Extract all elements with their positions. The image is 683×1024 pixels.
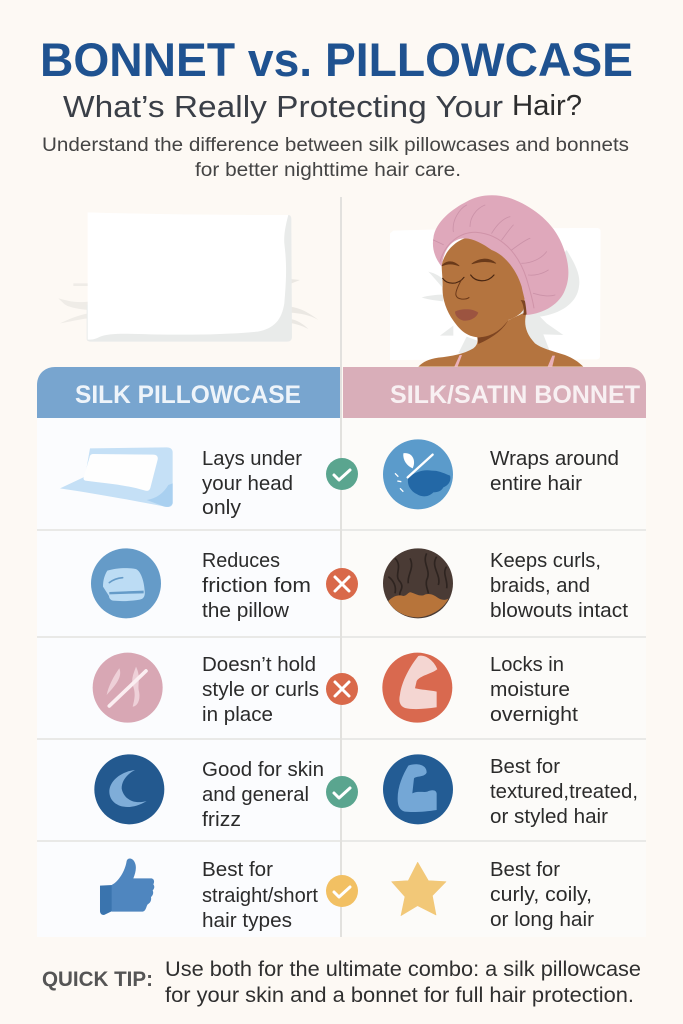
row 1 left text: only (202, 497, 241, 519)
subtitle heading: Hair? (512, 90, 582, 122)
row 4 left text: and general (202, 784, 309, 806)
bonnet pleats (433, 205, 555, 296)
check badge yellow (326, 875, 358, 907)
title: BONNET vs. PILLOWCASE (40, 33, 633, 86)
row 3 right text: overnight (490, 704, 578, 726)
row 2 right text (490, 550, 628, 622)
row 4 right icon: flexed arm (383, 754, 453, 824)
quick tip text: for your skin and a bonnet for full hair protection. (165, 984, 634, 1007)
row 5 right text: Best for (490, 859, 560, 881)
panel header: silk/satin bonnet (343, 367, 646, 418)
illustration: sleeping woman in bonnet (390, 195, 601, 367)
cross badge (326, 673, 358, 705)
panel header: silk pillowcase: SILK PILLOWCASE (75, 381, 301, 409)
row 2 left icon: folded silk (91, 548, 161, 618)
row 3 left text: in place (202, 704, 273, 726)
panel header: silk pillowcase (37, 367, 340, 418)
subtitle heading: What’s Really Protecting Your (63, 89, 503, 124)
row 3 right text: moisture (490, 679, 570, 701)
row 4 left text (202, 759, 324, 831)
row 1 right text: entire hair (490, 473, 582, 495)
row 4 left text: frizz (202, 809, 241, 831)
row 1 right icon: wrap (383, 439, 453, 509)
intro text: for better nighttime hair care. (195, 160, 461, 181)
row 5 right text (490, 859, 594, 931)
row 3 right icon: arm strength (382, 653, 452, 723)
nose (456, 279, 469, 299)
intro text: Understand the difference between silk pillowcases and bonnets (42, 135, 629, 156)
row 1 left text (202, 448, 302, 519)
panel: comparison rows background (37, 197, 646, 937)
row 5 right icon: star (392, 862, 446, 916)
cross badge (326, 568, 358, 600)
check badge (326, 458, 358, 490)
row 4 right text: or styled hair (490, 806, 608, 828)
row 3 right text (490, 654, 578, 726)
face (442, 237, 525, 337)
row 1 left icon: pillowcase (60, 447, 173, 507)
lips (455, 309, 478, 321)
check badge (326, 776, 358, 808)
quick tip label: QUICK TIP: (42, 968, 153, 991)
quick tip text: Use both for the ultimate combo: a silk pillowcase (165, 958, 641, 981)
row 4 left icon: moon (94, 754, 164, 824)
row 2 left text: friction fom (202, 575, 311, 597)
row 5 left text: straight/short (202, 885, 318, 907)
row 1 left text: Lays under (202, 448, 302, 470)
row 5 right text: curly, coily, (490, 884, 592, 906)
quick tip text (165, 958, 641, 1007)
row 3 left text (202, 654, 319, 726)
row 2 left text: the pillow (202, 600, 290, 622)
row 2 right icon: curls (383, 548, 453, 618)
row 3 left icon: crossed hair strands (93, 653, 163, 723)
panel header: silk/satin bonnet: SILK/SATIN BONNET (390, 381, 640, 409)
row 4 left text: Good for skin (202, 759, 324, 781)
row 4 right text: textured,treated, (490, 781, 638, 803)
shoulders and neck (418, 312, 583, 367)
chin shadow (477, 320, 508, 344)
row 2 left text: Reduces (202, 550, 280, 572)
row 3 left text: Doesn’t hold (202, 654, 316, 676)
intro text (42, 135, 629, 181)
row 4 right text: Best for (490, 756, 560, 778)
row 5 right text: or long hair (490, 909, 594, 931)
row 5 left text: Best for (202, 859, 273, 881)
row 1 right text (490, 448, 619, 495)
row 3 right text: Locks in (490, 654, 564, 676)
row 2 right text: Keeps curls, (490, 550, 601, 572)
neck shadow (521, 300, 529, 315)
row 2 right text: blowouts intact (490, 600, 628, 622)
pillow folds (520, 250, 579, 356)
bonnet band (440, 232, 534, 308)
row 1 left text: your head (202, 473, 293, 495)
row 5 left icon: thumbs up (100, 858, 154, 915)
white pillow (390, 228, 601, 360)
row 2 left text (202, 550, 311, 622)
row 5 left text: hair types (202, 910, 292, 932)
bra straps (454, 355, 555, 367)
eyebrows (442, 259, 496, 266)
row 4 right text (490, 756, 638, 828)
illustration: silk pillow (58, 212, 318, 342)
row 2 right text: braids, and (490, 575, 590, 597)
row 1 right text: Wraps around (490, 448, 619, 470)
row 3 left text: style or curls (202, 679, 319, 701)
row 5 left text (202, 859, 318, 932)
bonnet (433, 195, 568, 315)
closed eyes (443, 275, 494, 283)
